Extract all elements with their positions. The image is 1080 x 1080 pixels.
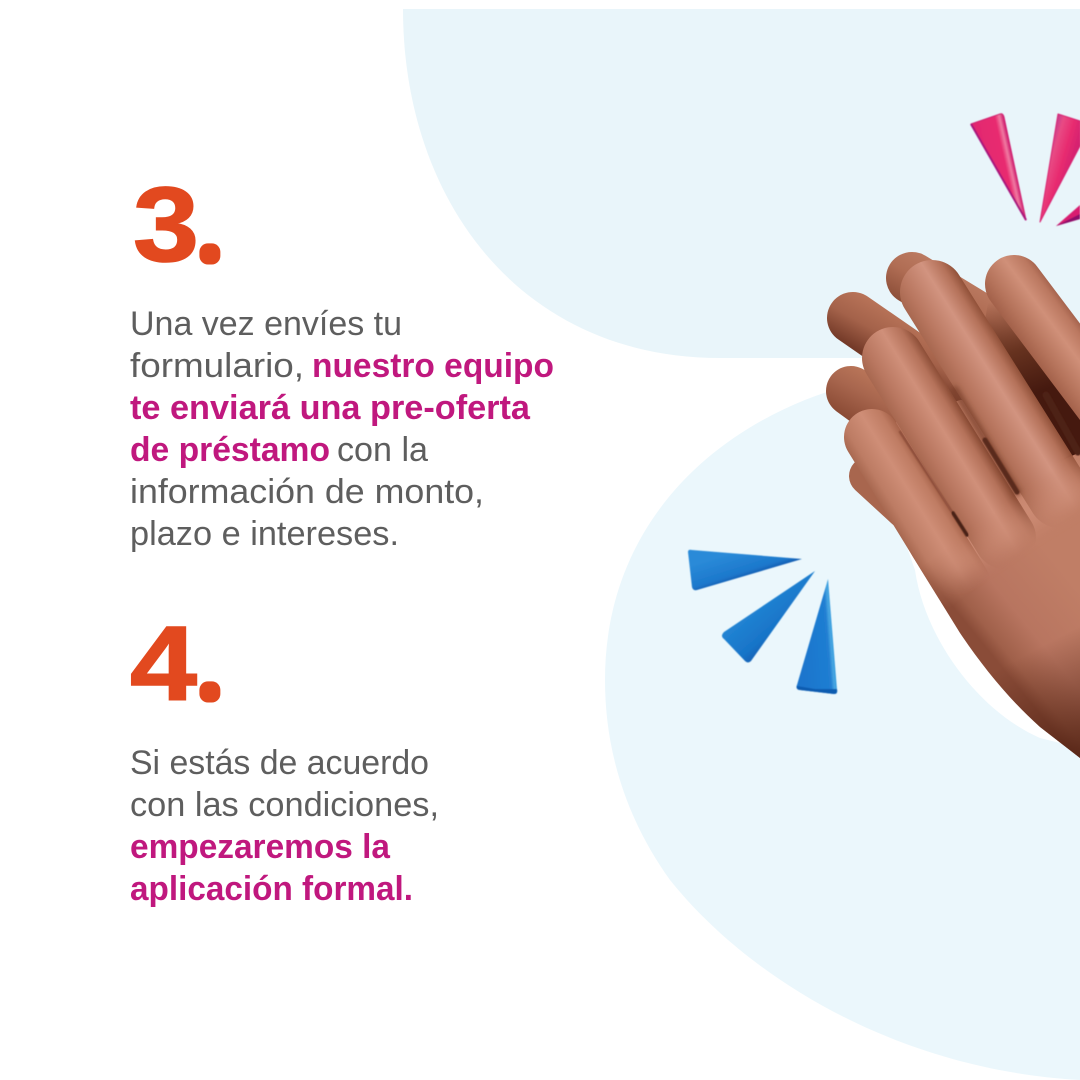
step 3 number: 3 bbox=[133, 166, 199, 284]
finger gaps bbox=[900, 390, 1078, 535]
icon: pink sparks bbox=[971, 114, 1080, 226]
step 3 text block: de préstamo bbox=[130, 431, 330, 469]
background blob: top bbox=[403, 9, 1080, 358]
background blob: bottom bbox=[605, 385, 1080, 1080]
step 3 text block: información de monto, bbox=[130, 473, 484, 511]
step 3 text block: con la bbox=[337, 431, 428, 469]
icon: blue sparks bbox=[688, 550, 837, 694]
step 4 text block: aplicación formal. bbox=[130, 870, 413, 908]
step 3 text block: nuestro equipo bbox=[312, 347, 554, 385]
step 4 text block: empezaremos la bbox=[130, 828, 391, 866]
step 4 text block: Si estás de acuerdo bbox=[130, 744, 429, 782]
step 4 text block bbox=[130, 744, 439, 908]
icon: clapping hand bbox=[845, 278, 1080, 758]
dark shadow between fingers bbox=[986, 307, 1080, 456]
step 3 text block: plazo e intereses. bbox=[130, 515, 399, 553]
step 3 text block: Una vez envíes tu bbox=[130, 305, 402, 343]
step 3 text block: formulario, bbox=[130, 347, 304, 385]
back fingers bbox=[851, 278, 1060, 510]
step 3 number: . bbox=[206, 231, 214, 262]
palm bbox=[896, 400, 1080, 758]
fingers bbox=[872, 284, 1080, 583]
step 4 number: . bbox=[206, 669, 214, 700]
step 3 text block: te enviará una pre-oferta bbox=[130, 389, 531, 427]
knuckle highlight bbox=[954, 498, 1038, 573]
step 4 text block: con las condiciones, bbox=[130, 786, 439, 824]
step 3 text block bbox=[130, 305, 554, 553]
step 4 number: 4 bbox=[130, 605, 197, 723]
